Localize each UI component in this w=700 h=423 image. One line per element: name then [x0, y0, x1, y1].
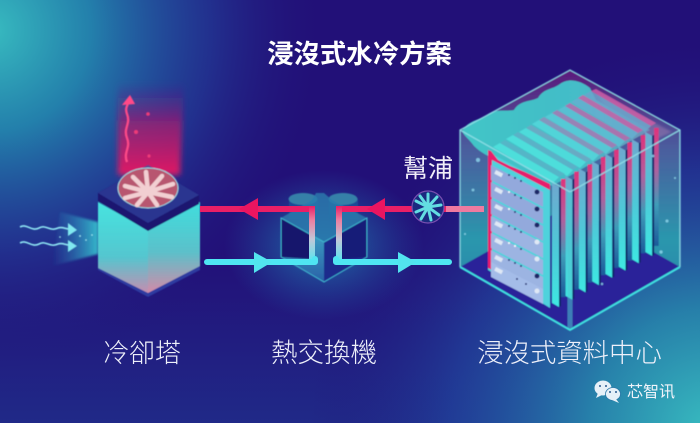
- heat exchanger: [281, 193, 367, 282]
- cold pipe: [207, 252, 449, 273]
- arrow: cold left: [254, 252, 272, 273]
- rack blade 5: [605, 150, 619, 278]
- rack blade 6: [618, 142, 632, 270]
- icon: incoming air arrows: [20, 223, 93, 252]
- server unit 6: [491, 250, 543, 292]
- rack blade 8: [645, 128, 659, 256]
- arrow: cold right: [398, 252, 416, 273]
- data center tank: [460, 70, 680, 330]
- label: heat exchanger: 熱交換機: [271, 338, 377, 368]
- hot pipe: [200, 198, 484, 262]
- right riser: [336, 206, 342, 262]
- glass frame: [460, 70, 680, 330]
- glass volume: [460, 70, 680, 330]
- exchanger cylinders: [288, 193, 358, 219]
- tower lid: [98, 165, 199, 231]
- server unit 2: [491, 182, 543, 224]
- rack blade 7: [632, 135, 645, 263]
- title: 浸沒式水冷方案: [267, 39, 452, 69]
- server unit 4: [491, 216, 543, 258]
- left riser: [309, 206, 315, 262]
- rack blade tops: [493, 89, 656, 183]
- icon: tower fan: [118, 165, 178, 208]
- rack blade 4: [592, 157, 606, 285]
- icon: wechat: [594, 380, 620, 403]
- label: pump: 幫浦: [403, 155, 453, 183]
- bubbles: [464, 155, 676, 285]
- watermark: [594, 380, 675, 403]
- label: immersion data center: 浸沒式資料中心: [477, 338, 662, 368]
- rack blade 3: [579, 164, 592, 292]
- purple haze above racks: [596, 92, 672, 142]
- rack blade 2: [565, 172, 579, 300]
- exchanger cube: [281, 193, 367, 282]
- icon: rising heat arrow: [122, 95, 151, 162]
- server unit 5: [491, 233, 543, 275]
- arrow: hot right: [367, 198, 385, 220]
- tank floor: [460, 205, 680, 330]
- front server rack: [488, 150, 550, 308]
- label: cooling tower: 冷卻塔: [103, 338, 181, 368]
- tower body: [98, 202, 200, 297]
- server unit 7: [491, 262, 543, 304]
- icon: pump: [412, 191, 444, 223]
- server unit 3: [491, 199, 543, 241]
- incoming air glow: [52, 212, 98, 266]
- heat beam: [118, 82, 184, 175]
- arrow: hot left: [239, 198, 258, 220]
- rack blade 1: [552, 179, 566, 307]
- water surface: [462, 81, 650, 186]
- watermark text: 芯智讯: [627, 383, 675, 401]
- cooling tower illustration: [20, 82, 200, 297]
- server unit 1: [491, 165, 543, 207]
